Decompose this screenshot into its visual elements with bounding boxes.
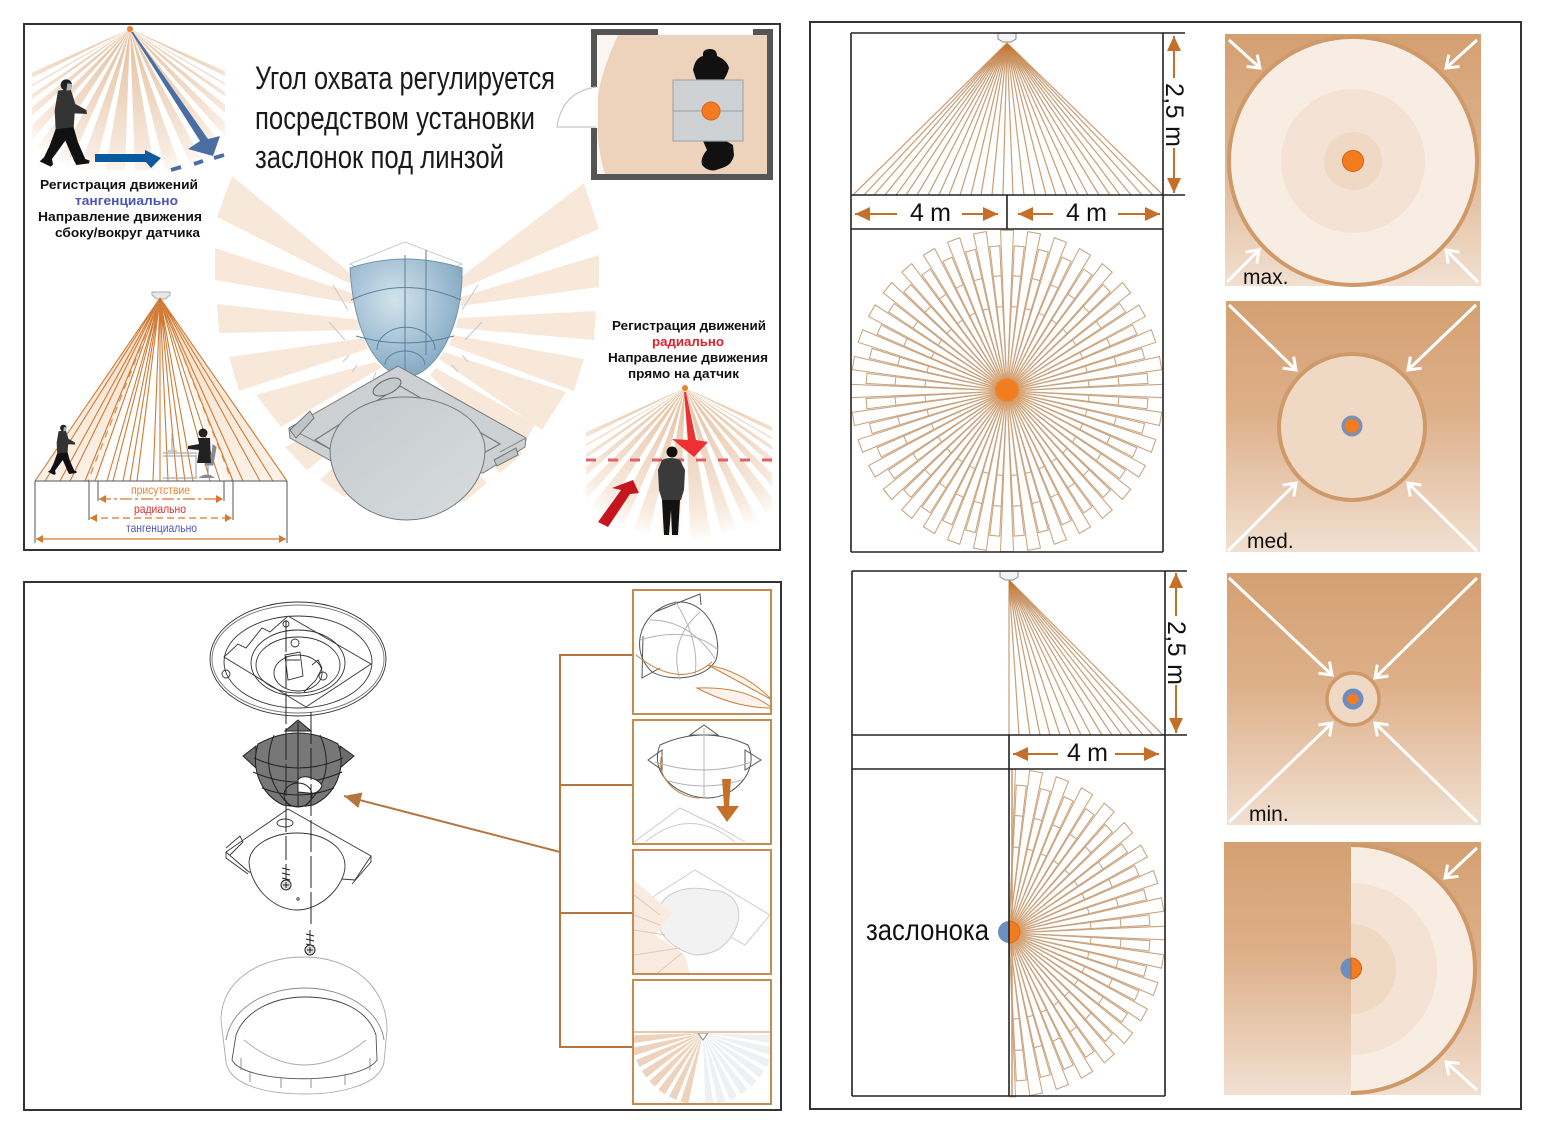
text: tangential detection note xyxy=(38,177,202,240)
frame and dimensions: full coverage: 4 m xyxy=(1066,199,1107,227)
frame and dimensions: full coverage: 2,5 m xyxy=(1160,83,1188,147)
coverage setting: max: max. xyxy=(1243,266,1289,289)
text: radial detection note: Регистрация движений xyxy=(612,318,766,333)
cone dimensions xyxy=(35,481,287,543)
diagram: full coverage side view xyxy=(853,33,1163,195)
room plan with sensor xyxy=(557,29,770,177)
exploded view: mounting ring xyxy=(210,602,386,716)
frame and dimensions: half coverage xyxy=(852,571,1190,1096)
diagram: full coverage top view xyxy=(850,230,1164,552)
text: tangential detection note: тангенциально xyxy=(75,193,178,208)
text: radial detection note xyxy=(608,318,768,381)
text: radial detection note: радиально xyxy=(652,334,724,349)
text: radial detection note: Направление движения xyxy=(608,350,768,365)
diagram: detection cone side view xyxy=(35,292,287,481)
title: Угол охвата регулируется xyxy=(255,60,555,96)
exploded view: lens with shutters xyxy=(243,720,354,807)
diagram: half coverage top view xyxy=(984,769,1166,1097)
text: tangential detection note: сбоку/вокруг датчика xyxy=(55,225,201,240)
text: tangential detection note: Регистрация движений xyxy=(40,177,198,192)
exploded view: cover xyxy=(221,957,387,1094)
title xyxy=(255,60,555,175)
thumbnail: resulting half coverage xyxy=(631,980,775,1105)
thumbnail: removing shutter xyxy=(633,590,772,714)
coverage setting: min: min. xyxy=(1249,803,1289,826)
coverage setting: half with shutter xyxy=(1224,842,1481,1095)
panel: detection principles xyxy=(0,24,835,556)
thumbnail: inserting shutter xyxy=(633,720,771,844)
diagram: tangential detection fan xyxy=(32,26,225,172)
label: shutter: заслонока xyxy=(866,914,989,947)
frame and dimensions: half coverage: 4 m xyxy=(1067,739,1108,767)
diagram: half coverage side view xyxy=(1000,571,1163,735)
frame and dimensions: full coverage xyxy=(851,33,1188,552)
coverage setting: min xyxy=(1227,573,1481,826)
panel: coverage diagrams xyxy=(810,22,1521,1109)
cone dimensions: радиально xyxy=(134,502,186,516)
title: посредством установки xyxy=(255,100,535,136)
frame and dimensions: full coverage: 4 m xyxy=(910,199,951,227)
title: заслонок под линзой xyxy=(255,139,504,175)
sensor lens with detection rays xyxy=(215,176,599,520)
connector lines and arrow xyxy=(344,655,633,1047)
text: tangential detection note: Направление движения xyxy=(38,209,202,224)
frame and dimensions: half coverage: 2,5 m xyxy=(1162,621,1190,685)
coverage setting: med xyxy=(1226,301,1480,553)
text: radial detection note: прямо на датчик xyxy=(628,366,740,381)
thumbnail: installed shutter xyxy=(633,850,771,975)
coverage setting: med: med. xyxy=(1247,530,1294,553)
cone dimensions: присутствие xyxy=(131,483,190,497)
cone dimensions: тангенциально xyxy=(126,521,197,535)
exploded view: base plate and dome xyxy=(226,809,371,910)
panel: installation of shutters xyxy=(24,582,781,1110)
exploded view: alignment lines and screws xyxy=(281,620,315,955)
diagram: radial detection fan xyxy=(586,385,772,536)
coverage setting: max xyxy=(1225,34,1481,289)
